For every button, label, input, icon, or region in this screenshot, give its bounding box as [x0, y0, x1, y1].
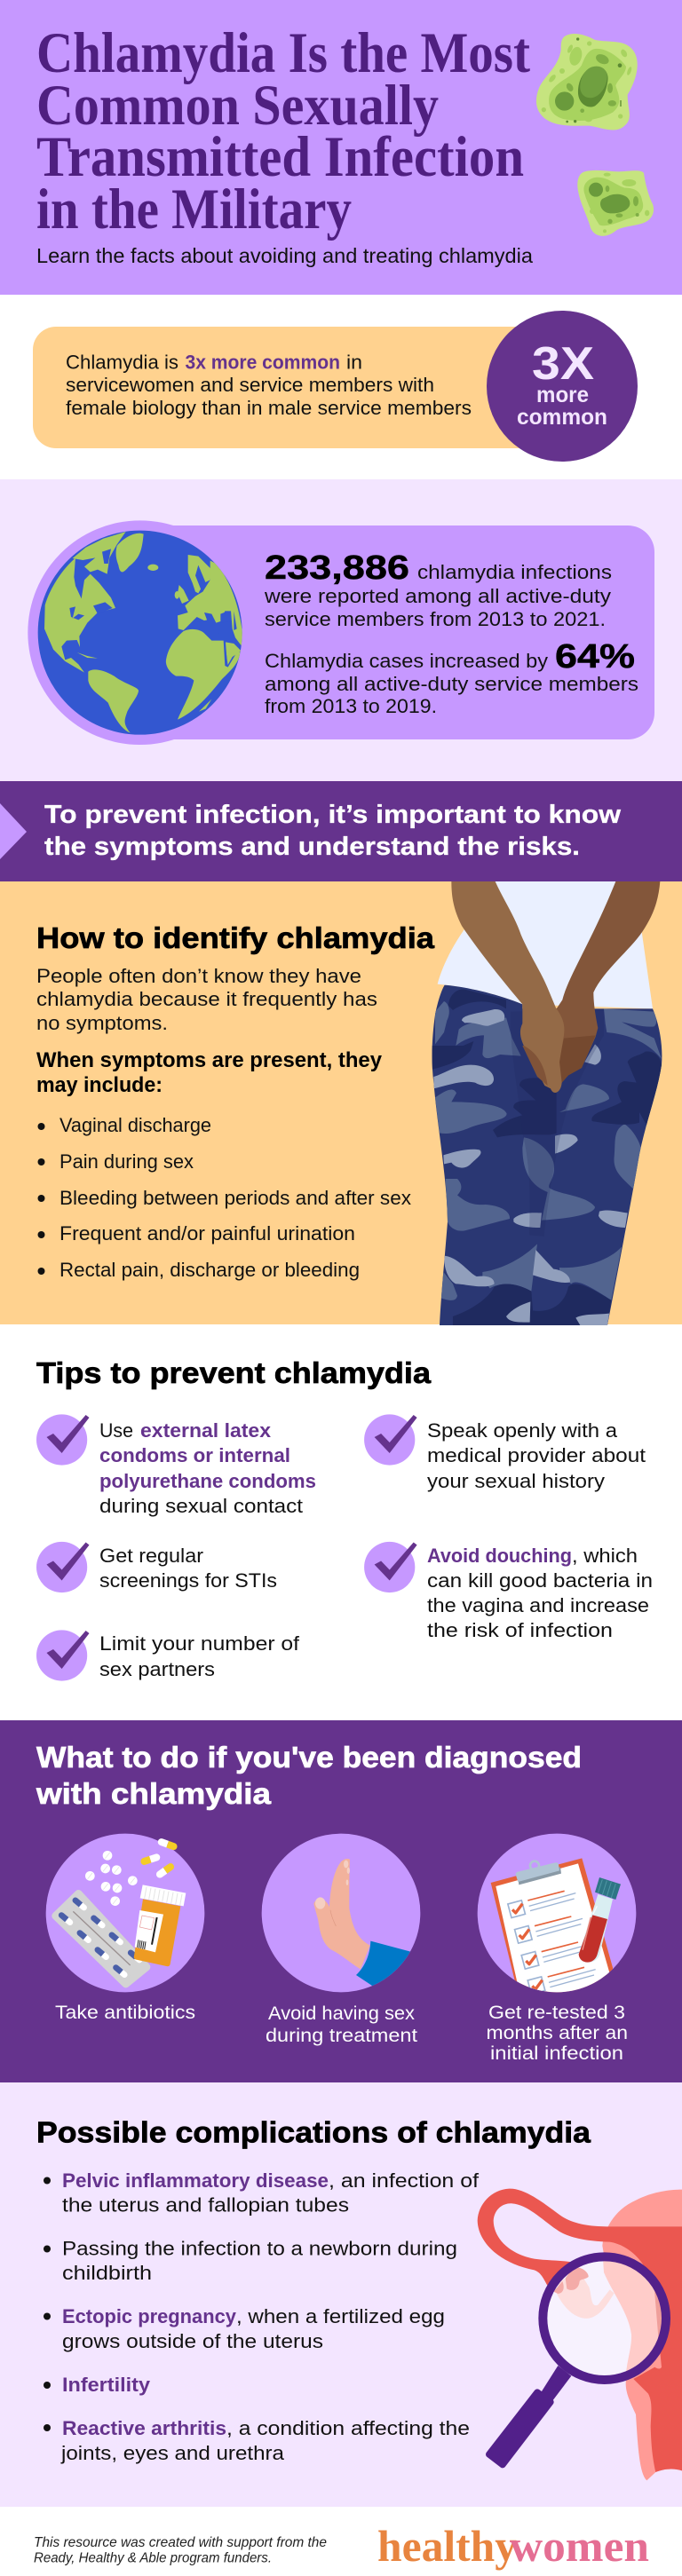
tip: condoms — [36, 1414, 316, 1517]
tip: avoid douching: Avoid douching — [427, 1545, 572, 1567]
tip: speak openly — [364, 1414, 646, 1492]
tip: condoms: condoms or internal — [99, 1444, 290, 1466]
logo: healthywomen: healthy — [377, 2521, 517, 2571]
tip: avoid douching: , which — [572, 1545, 638, 1567]
panel: 3x more common — [33, 311, 638, 462]
complications list: , a condition affecting the — [226, 2417, 470, 2439]
caption: re-test: Get re-tested 3 — [488, 2003, 625, 2023]
caption: re-test: initial infection — [490, 2043, 623, 2064]
stat card — [107, 525, 654, 739]
arrow — [0, 803, 27, 859]
test tube — [579, 1894, 613, 1963]
stat text: service members from 2013 to 2021. — [265, 608, 606, 630]
symptom list: Rectal pain, discharge or bleeding — [59, 1259, 360, 1281]
tip: speak openly: medical provider about — [427, 1444, 646, 1466]
symptom list: Pain during sex — [59, 1150, 194, 1173]
badge: 3X more common: common — [517, 405, 607, 430]
stat text — [264, 549, 638, 717]
stat text: 233,886 — [265, 549, 409, 587]
heading: What to do if you've been diagnosed — [36, 1741, 582, 1774]
tablets — [103, 1851, 112, 1861]
intro text — [36, 965, 377, 1034]
stat text: 64% — [555, 638, 635, 676]
left arm — [451, 881, 564, 1093]
heading: Possible complications of chlamydia — [36, 2116, 591, 2148]
icon: clipboard and test tube — [478, 1834, 636, 2006]
tip: avoid douching — [364, 1542, 653, 1641]
caption: take antibiotics: Take antibiotics — [55, 2003, 195, 2023]
symptom list: Vaginal discharge — [59, 1114, 211, 1136]
tip: partners: sex partners — [99, 1658, 215, 1680]
tip: avoid douching: the risk of infection — [427, 1619, 613, 1641]
complications list: Infertility — [62, 2374, 151, 2396]
heading: Tips to prevent chlamydia — [36, 1356, 432, 1389]
tip: condoms: Use — [99, 1419, 133, 1442]
banner: prevent infection — [0, 781, 682, 881]
symptom list: Bleeding between periods and after sex — [59, 1187, 411, 1209]
title: Chlamydia Is the Most — [36, 21, 530, 85]
banner text — [44, 801, 621, 861]
title: Common Sexually — [36, 74, 439, 138]
pill bottle — [134, 1899, 180, 1966]
lens contents — [547, 2262, 632, 2375]
caption: avoid sex: Avoid having sex — [268, 2003, 416, 2024]
complications list: Pelvic inflammatory disease — [62, 2169, 329, 2192]
tip: screenings: Get regular — [99, 1545, 203, 1567]
caption: re-test — [487, 2003, 628, 2064]
funding note — [34, 2535, 327, 2566]
stat text: among all active-duty service members — [265, 673, 638, 695]
intro text: no symptoms. — [36, 1012, 168, 1034]
tip: screenings: screenings for STIs — [99, 1569, 277, 1592]
title — [36, 21, 530, 241]
illustration: uterus under magnifying glass — [478, 2189, 682, 2480]
tip: speak openly: Speak openly with a — [427, 1419, 618, 1442]
badge: 3X more common — [487, 311, 638, 462]
callout text: in — [346, 352, 362, 373]
tip: partners: Limit your number of — [99, 1632, 300, 1655]
complications list: Reactive arthritis — [62, 2417, 226, 2439]
complications list — [44, 2169, 480, 2464]
blister pack — [56, 1893, 147, 1984]
subheading: When symptoms are present, they — [36, 1048, 383, 1072]
title: Transmitted Infection — [36, 125, 524, 189]
callout pill — [33, 327, 566, 448]
subheading — [36, 1048, 383, 1097]
icon: hand signalling stop — [262, 1834, 426, 1995]
icon: antibiotics — [46, 1834, 204, 1992]
footer — [34, 2521, 649, 2571]
panel: possible complications — [0, 2082, 682, 2507]
caption: avoid sex — [266, 2003, 417, 2046]
callout text: 3x more common — [185, 352, 340, 373]
panel: header — [0, 0, 682, 295]
tip: condoms: during sexual contact — [99, 1495, 303, 1517]
complications list: the uterus and fallopian tubes — [62, 2194, 349, 2216]
badge: 3X more common: 3X — [532, 338, 594, 390]
camouflage pants — [432, 985, 662, 1325]
complications list: joints, eyes and urethra — [60, 2442, 285, 2464]
subheading: may include: — [36, 1073, 163, 1097]
badge: 3X more common: more — [536, 383, 589, 407]
funding note: Ready, Healthy & Able program funders. — [34, 2551, 272, 2566]
magnifying glass — [489, 2366, 571, 2465]
icon: globe — [28, 520, 252, 745]
panel: tips to prevent — [36, 1356, 653, 1681]
complications list: childbirth — [62, 2262, 152, 2284]
callout text — [66, 352, 472, 419]
logo: healthywomen: women — [510, 2521, 649, 2571]
icon: large bacteria cell — [536, 34, 638, 130]
panel: statistics — [0, 479, 682, 781]
callout text: Chlamydia is — [66, 352, 178, 373]
symptom list: Frequent and/or painful urination — [59, 1222, 355, 1245]
stat text: Chlamydia cases increased by — [265, 650, 548, 672]
stat text: chlamydia infections — [417, 561, 612, 583]
complications list: Ectopic pregnancy — [62, 2305, 237, 2327]
heading: How to identify chlamydia — [36, 921, 435, 954]
banner text: the symptoms and understand the risks. — [44, 833, 580, 861]
illustration: person with camouflage pants — [426, 881, 666, 1325]
heading: with chlamydia — [36, 1777, 272, 1810]
callout text: female biology than in male service members — [66, 397, 472, 419]
symptom list — [37, 1114, 411, 1281]
tip: condoms: polyurethane condoms — [99, 1470, 316, 1492]
complications list: , an infection of — [329, 2169, 480, 2192]
caption: re-test: months after an — [487, 2023, 628, 2043]
intro text: People often don’t know they have — [36, 965, 361, 987]
complications list: grows outside of the uterus — [62, 2330, 323, 2352]
tip: avoid douching: the vagina and increase — [427, 1594, 649, 1616]
panel: how to identify — [0, 881, 682, 1325]
banner text: To prevent infection, it’s important to know — [44, 801, 621, 829]
subtitle: Learn the facts about avoiding and treating chlamydia — [36, 244, 533, 267]
tip: screenings — [36, 1542, 277, 1592]
panel: what to do if diagnosed — [0, 1720, 682, 2082]
complications list: Passing the infection to a newborn during — [62, 2238, 457, 2260]
tip: partners — [36, 1630, 300, 1681]
tip: avoid douching: can kill good bacteria in — [427, 1569, 653, 1592]
intro text: chlamydia because it frequently has — [36, 988, 377, 1010]
stat text: were reported among all active-duty — [264, 585, 611, 607]
tip: speak openly: your sexual history — [427, 1470, 605, 1492]
right arm — [557, 881, 660, 1083]
capsules — [157, 1837, 178, 1851]
caption: avoid sex: during treatment — [266, 2026, 417, 2046]
logo: healthywomen — [377, 2521, 649, 2571]
shirt — [438, 881, 653, 1008]
callout text: servicewomen and service members with — [66, 374, 434, 396]
title: in the Military — [36, 178, 352, 241]
complications list: , when a fertilized egg — [236, 2305, 445, 2327]
tip: condoms: external latex — [140, 1419, 272, 1442]
funding note: This resource was created with support from the — [34, 2535, 327, 2550]
stat text: from 2013 to 2019. — [265, 695, 437, 717]
icon: small bacteria cell — [577, 170, 654, 236]
heading — [36, 1741, 582, 1810]
